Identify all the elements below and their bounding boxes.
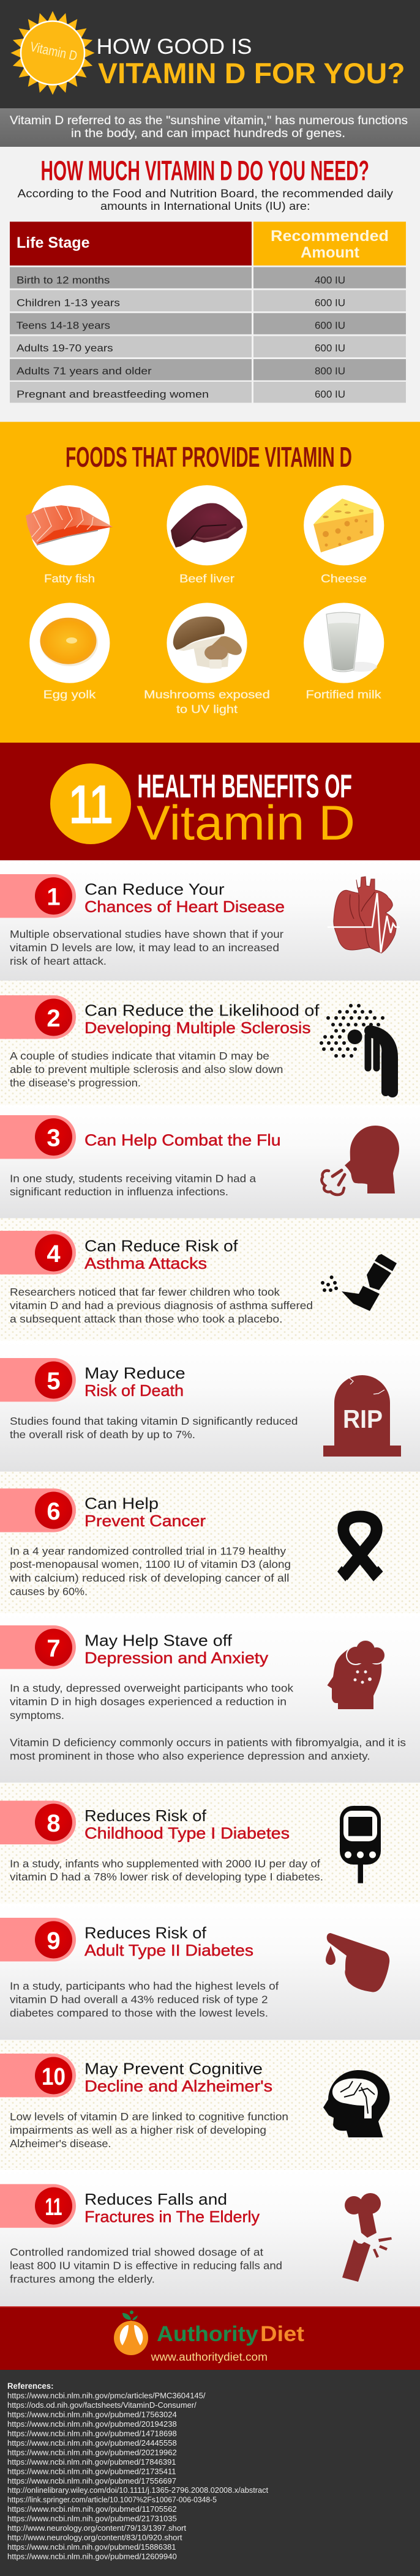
food: beef liver <box>167 485 247 585</box>
text block: Researchers noticed that far fewer children who took <box>10 1286 280 1298</box>
heading: Reduces Falls and <box>84 2190 227 2208</box>
heading <box>137 768 355 850</box>
text block: vitamin D and had a previous diagnosis of asthma suffered <box>10 1299 313 1312</box>
panel: benefit 4 <box>0 1218 420 1340</box>
heading: Reduces Risk of <box>84 1923 207 1942</box>
icon: authority diet logo <box>114 2311 148 2355</box>
text block: In a 4 year randomized controlled trial in 1179 healthy <box>10 1545 286 1557</box>
panel: benefit 11 <box>0 2170 420 2306</box>
panel: foods <box>0 422 420 743</box>
text block: https://www.ncbi.nlm.nih.gov/pubmed/15886381 <box>7 2542 176 2552</box>
text block <box>10 928 283 967</box>
food: beef liver: Beef liver <box>179 572 234 585</box>
table: recommended amounts: Recommended <box>271 228 389 245</box>
table: recommended amounts: Life Stage <box>17 234 90 251</box>
heading: References: <box>7 2381 54 2391</box>
heading: Chances of Heart Disease <box>84 897 285 916</box>
text block: http://onlinelibrary.wiley.com/doi/10.1111/j.1365-2796.2008.02008.x/abstract <box>7 2485 268 2495</box>
text block: https://www.ncbi.nlm.nih.gov/pmc/articles/PMC3604145/ <box>7 2391 206 2400</box>
number ribbon: 3 <box>47 1125 61 1152</box>
text block <box>10 1857 323 1883</box>
text block: A couple of studies indicate that vitamin D may be <box>10 1050 269 1062</box>
logo text: Authority <box>157 2322 258 2346</box>
heading <box>84 2190 260 2225</box>
food: fortified milk: Fortified milk <box>306 688 381 700</box>
text block: https://www.ncbi.nlm.nih.gov/pubmed/12609940 <box>7 2552 177 2561</box>
food: egg yolk <box>29 603 110 700</box>
title: HOW GOOD IS <box>97 35 252 59</box>
number ribbon <box>0 1625 76 1669</box>
table: recommended amounts: Pregnant and breastfeeding women <box>17 389 209 400</box>
title: VITAMIN D FOR YOU? <box>98 57 405 89</box>
number ribbon: 9 <box>47 1928 61 1954</box>
text block: Low levels of vitamin D are linked to cognitive function <box>10 2110 288 2123</box>
text block: the overall risk of death by up to 7%. <box>10 1428 195 1441</box>
text block: https://ods.od.nih.gov/factsheets/VitaminD-Consumer/ <box>7 2400 197 2410</box>
text block <box>10 1286 313 1325</box>
text block: vitamin D had overall a 43% reduced risk of type 2 <box>10 1993 268 2005</box>
logo text: www.authoritydiet.com <box>151 2351 268 2363</box>
number ribbon: 6 <box>47 1498 61 1525</box>
heading: Can Help Combat the Flu <box>84 1130 280 1149</box>
number ribbon: 4 <box>47 1241 61 1268</box>
icon: sun badge: Vitamin D <box>29 39 78 64</box>
icon: number badge 11 <box>50 763 131 844</box>
heading: Asthma Attacks <box>84 1254 207 1272</box>
number ribbon: 7 <box>47 1635 61 1662</box>
text block: https://www.ncbi.nlm.nih.gov/pubmed/14718698 <box>7 2429 177 2438</box>
table: recommended amounts: Teens 14-18 years <box>16 321 110 332</box>
panel: benefit 3 <box>0 1105 420 1218</box>
text block: a subsequent attack than those who took a placebo. <box>10 1313 283 1325</box>
logo text <box>151 2322 304 2363</box>
food: mushrooms <box>144 603 270 716</box>
heading: Vitamin D <box>137 795 355 850</box>
panel: benefit 9 <box>0 1903 420 2040</box>
icon: heart with ecg <box>328 877 400 953</box>
food: cheese: Cheese <box>321 572 367 585</box>
text block <box>10 1980 279 2019</box>
heading: Childhood Type I Diabetes <box>84 1824 290 1843</box>
heading <box>84 1494 206 1530</box>
panel: benefit 6 <box>0 1472 420 1613</box>
text block: impairments as well as a higher risk of developing <box>10 2124 266 2136</box>
number ribbon: 1 <box>47 884 61 911</box>
number ribbon <box>0 1801 76 1844</box>
number ribbon: 2 <box>47 1005 61 1032</box>
text block: the disease's progression. <box>10 1077 141 1089</box>
heading: May Help Stave off <box>84 1631 233 1649</box>
heading: Can Reduce Risk of <box>84 1237 238 1255</box>
text block: vitamin D had a 78% lower risk of developing type I diabetes. <box>10 1871 323 1883</box>
heading: Risk of Death <box>84 1381 184 1400</box>
table: recommended amounts: Amount <box>301 244 360 261</box>
heading: Can Reduce Your <box>84 880 225 898</box>
text block: Alzheimer's disease. <box>10 2137 111 2150</box>
food: mushrooms: Mushrooms exposed <box>144 688 270 700</box>
text block <box>17 187 394 212</box>
text block: Controlled randomized trial showed dosage of at <box>10 2246 263 2258</box>
text block: Vitamin D deficiency commonly occurs in patients with fibromyalgia, and it is <box>10 1736 406 1748</box>
heading <box>84 880 285 916</box>
text block: https://www.ncbi.nlm.nih.gov/pubmed/17556697 <box>7 2476 176 2485</box>
panel: how much vitamin d <box>0 147 420 422</box>
panel: benefit 10 <box>0 2040 420 2170</box>
text block: https://www.ncbi.nlm.nih.gov/pubmed/17563024 <box>7 2410 177 2419</box>
text block: Studies found that taking vitamin D significantly reduced <box>10 1415 298 1427</box>
text block: https://link.springer.com/article/10.1007%2Fs10067-006-0348-5 <box>7 2495 217 2504</box>
text block: most prominent in those who also experience depression and anxiety. <box>10 1750 370 1762</box>
text block <box>10 2110 288 2150</box>
text block: causes by 60%. <box>10 1586 88 1598</box>
text block: https://www.ncbi.nlm.nih.gov/pubmed/21731035 <box>7 2514 177 2523</box>
heading: Decline and Alzheimer's <box>84 2077 272 2095</box>
food: cheese <box>304 485 384 585</box>
icon: tombstone <box>323 1375 401 1457</box>
text block: https://www.ncbi.nlm.nih.gov/pubmed/11705562 <box>7 2504 177 2514</box>
text block: In a study, infants who supplemented with 2000 IU per day of <box>10 1857 320 1869</box>
heading: May Prevent Cognitive <box>84 2059 263 2077</box>
number ribbon: 8 <box>47 1810 61 1837</box>
text block: https://www.ncbi.nlm.nih.gov/pubmed/17846391 <box>7 2457 176 2467</box>
heading: Adult Type II Diabetes <box>84 1941 253 1959</box>
panel: benefit 8 <box>0 1783 420 1903</box>
food: egg yolk: Egg yolk <box>43 688 96 700</box>
text block: risk of heart attack. <box>10 955 107 967</box>
text block <box>7 2391 268 2561</box>
panel: benefit 2 <box>0 981 420 1105</box>
heading <box>84 1631 268 1667</box>
text block: In one study, students receiving vitamin D had a <box>10 1172 256 1184</box>
number ribbon <box>0 1231 76 1274</box>
text block <box>10 1172 256 1198</box>
text block: amounts in International Units (IU) are: <box>100 199 310 212</box>
panel: benefit 7 <box>0 1613 420 1783</box>
table: recommended amounts: 600 IU <box>315 321 345 332</box>
text block: Multiple observational studies have shown that if your <box>10 928 283 940</box>
heading <box>84 2059 272 2095</box>
heading: Can Reduce the Likelihood of <box>84 1001 320 1019</box>
icon: awareness ribbon <box>337 1516 383 1581</box>
text block: https://www.ncbi.nlm.nih.gov/pubmed/21735411 <box>7 2467 176 2476</box>
icon: head with rain cloud <box>327 1641 384 1709</box>
food: fortified milk <box>304 603 384 700</box>
table: recommended amounts <box>10 221 406 403</box>
text block: vitamin D in high dosages experienced a reduction in <box>10 1696 287 1708</box>
icon: sun badge <box>11 11 94 95</box>
text block: https://www.ncbi.nlm.nih.gov/pubmed/24445558 <box>7 2438 177 2448</box>
panel: intro strip: Vitamin D referred to as the "sunshine vitamin," has numerous functions <box>10 114 408 127</box>
icon: coughing head <box>321 1126 399 1195</box>
text block: According to the Food and Nutrition Board, the recommended daily <box>17 187 394 199</box>
table: recommended amounts: 600 IU <box>315 297 345 308</box>
heading <box>84 1806 290 1843</box>
icon: head with brain <box>323 2070 389 2137</box>
panel: benefit 5 <box>0 1340 420 1472</box>
table: recommended amounts: 600 IU <box>315 343 345 354</box>
heading: Depression and Anxiety <box>84 1649 268 1667</box>
number ribbon <box>0 1488 76 1532</box>
icon: glucose meter <box>340 1806 381 1883</box>
icon: inhaler <box>321 1254 397 1311</box>
panel: footer <box>0 2306 420 2370</box>
text block: with calcium) reduced risk of developing cancer of all <box>9 1572 290 1584</box>
food: mushrooms: to UV light <box>176 703 238 716</box>
panel: health benefits banner <box>0 743 420 860</box>
text block <box>9 1545 291 1598</box>
number ribbon: 10 <box>42 2063 66 2090</box>
panel: intro strip: in the body, and can impact hundreds of genes. <box>71 127 345 140</box>
heading: Can Help <box>84 1494 159 1513</box>
text block: symptoms. <box>10 1709 64 1721</box>
number ribbon <box>0 2184 76 2228</box>
text block: In a study, depressed overweight participants who took <box>10 1682 293 1694</box>
text block: least 800 IU vitamin D is effective in reducing falls and <box>10 2260 282 2272</box>
number ribbon: 11 <box>45 2194 62 2221</box>
text block: http://www.neurology.org/content/83/10/920.short <box>7 2533 182 2542</box>
heading: May Reduce <box>84 1364 186 1383</box>
number ribbon <box>0 874 76 918</box>
text block <box>10 2246 282 2285</box>
text block <box>10 1415 298 1441</box>
icon: number badge 11: 11 <box>69 774 113 836</box>
table: recommended amounts: 800 IU <box>315 366 345 377</box>
number ribbon <box>0 1358 76 1401</box>
panel: benefit 1 <box>0 860 420 981</box>
panel: references <box>0 2370 420 2576</box>
icon: person with dotted nerves <box>320 1004 392 1092</box>
heading: Prevent Cancer <box>84 1512 206 1530</box>
number ribbon <box>0 1918 76 1961</box>
icon: tombstone: RIP <box>343 1405 383 1433</box>
number ribbon <box>0 1115 76 1159</box>
text block <box>10 1682 406 1762</box>
table: recommended amounts: Adults 19-70 years <box>17 343 113 354</box>
text block: https://www.ncbi.nlm.nih.gov/pubmed/20194238 <box>7 2419 177 2429</box>
text block: significant reduction in influenza infections. <box>10 1186 228 1198</box>
food: fatty fish <box>26 485 113 585</box>
number ribbon <box>0 2054 76 2097</box>
heading: Reduces Risk of <box>84 1806 207 1825</box>
heading <box>84 1364 186 1400</box>
heading <box>84 1923 253 1959</box>
heading: Developing Multiple Sclerosis <box>84 1019 311 1037</box>
table: recommended amounts: Children 1-13 years <box>17 297 120 308</box>
heading: Fractures in The Elderly <box>84 2207 260 2225</box>
icon: broken bone <box>342 2193 392 2282</box>
text block: fractures among the elderly. <box>10 2273 155 2285</box>
text block: post-menopausal women, 1100 IU of vitamin D3 (along <box>10 1558 291 1570</box>
title <box>97 35 405 89</box>
table: recommended amounts: Birth to 12 months <box>17 275 110 286</box>
text block: https://www.ncbi.nlm.nih.gov/pubmed/20219962 <box>7 2448 177 2457</box>
number ribbon: 5 <box>47 1368 61 1395</box>
text block: In a study, participants who had the highest levels of <box>10 1980 279 1992</box>
icon: finger with blood drop <box>326 1933 389 1992</box>
text block: able to prevent multiple sclerosis and also slow down <box>10 1063 283 1075</box>
food: fatty fish: Fatty fish <box>44 572 95 585</box>
panel: intro strip <box>0 108 420 147</box>
table: recommended amounts: 400 IU <box>315 275 345 286</box>
text block: diabetes compared to those with the lowest levels. <box>10 2006 268 2019</box>
number ribbon <box>0 995 76 1039</box>
heading <box>84 1001 320 1037</box>
text block <box>10 1050 283 1089</box>
text block: vitamin D levels are low, it may lead to an increased <box>10 941 279 954</box>
table: recommended amounts: Adults 71 years and older <box>17 366 152 377</box>
logo text: Diet <box>260 2322 304 2346</box>
text block: http://www.neurology.org/content/79/13/1397.short <box>7 2523 186 2533</box>
panel: header <box>0 0 420 108</box>
heading <box>84 1237 238 1272</box>
table: recommended amounts: 600 IU <box>315 389 345 400</box>
